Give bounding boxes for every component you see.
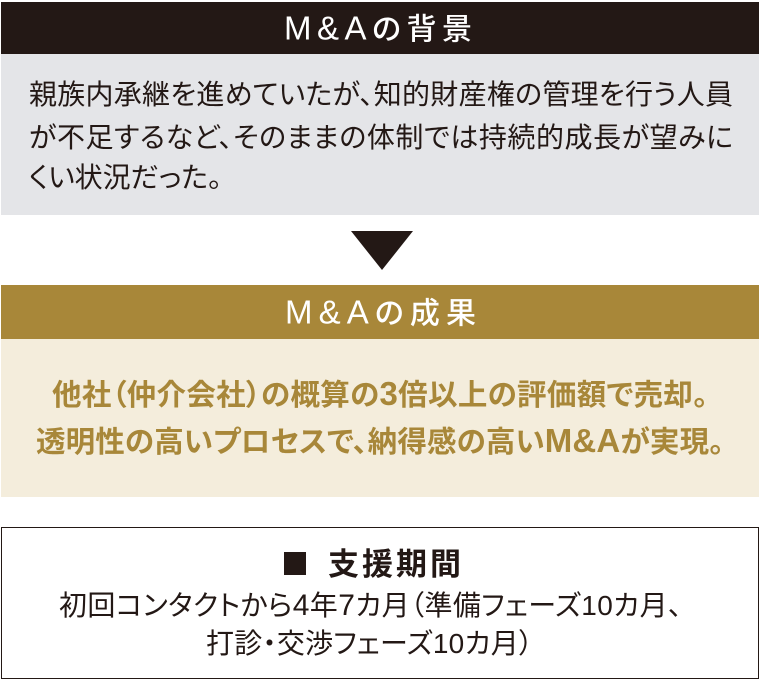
panel: support period box	[2, 528, 758, 678]
heading: support period: 支援期間	[328, 547, 461, 582]
text: background description: が不足するなど、そのままの体制では持続的成長が望みに	[29, 122, 733, 153]
text: result description: 他社（仲介会社）の概算の3倍以上の評価額で売却。	[52, 375, 708, 412]
text: background description: 親族内承継を進めていたが、知的財産権の管理を行う人員	[29, 79, 733, 110]
icon: square bullet	[284, 552, 306, 575]
arrow: down triangle	[351, 231, 413, 270]
panel: background text	[1, 54, 759, 215]
text: support period details: 初回コンタクトから4年7カ月（準備フェーズ10カ月、	[59, 589, 682, 622]
heading: M&A result: M&Aの成果	[285, 294, 476, 330]
text: support period details: 打診・交渉フェーズ10カ月）	[206, 628, 533, 659]
panel: background heading bar	[1, 2, 759, 54]
panel: result heading bar	[1, 285, 759, 339]
panel: result text	[1, 339, 759, 497]
text: background description	[29, 79, 733, 193]
text: result description: 透明性の高いプロセスで、納得感の高いM&Aが実現。	[36, 422, 724, 459]
text: background description: くい状況だった。	[29, 162, 222, 193]
heading: M&A background: M&Aの背景	[284, 10, 472, 46]
text: result description	[36, 375, 724, 459]
text: support period details	[59, 589, 682, 659]
